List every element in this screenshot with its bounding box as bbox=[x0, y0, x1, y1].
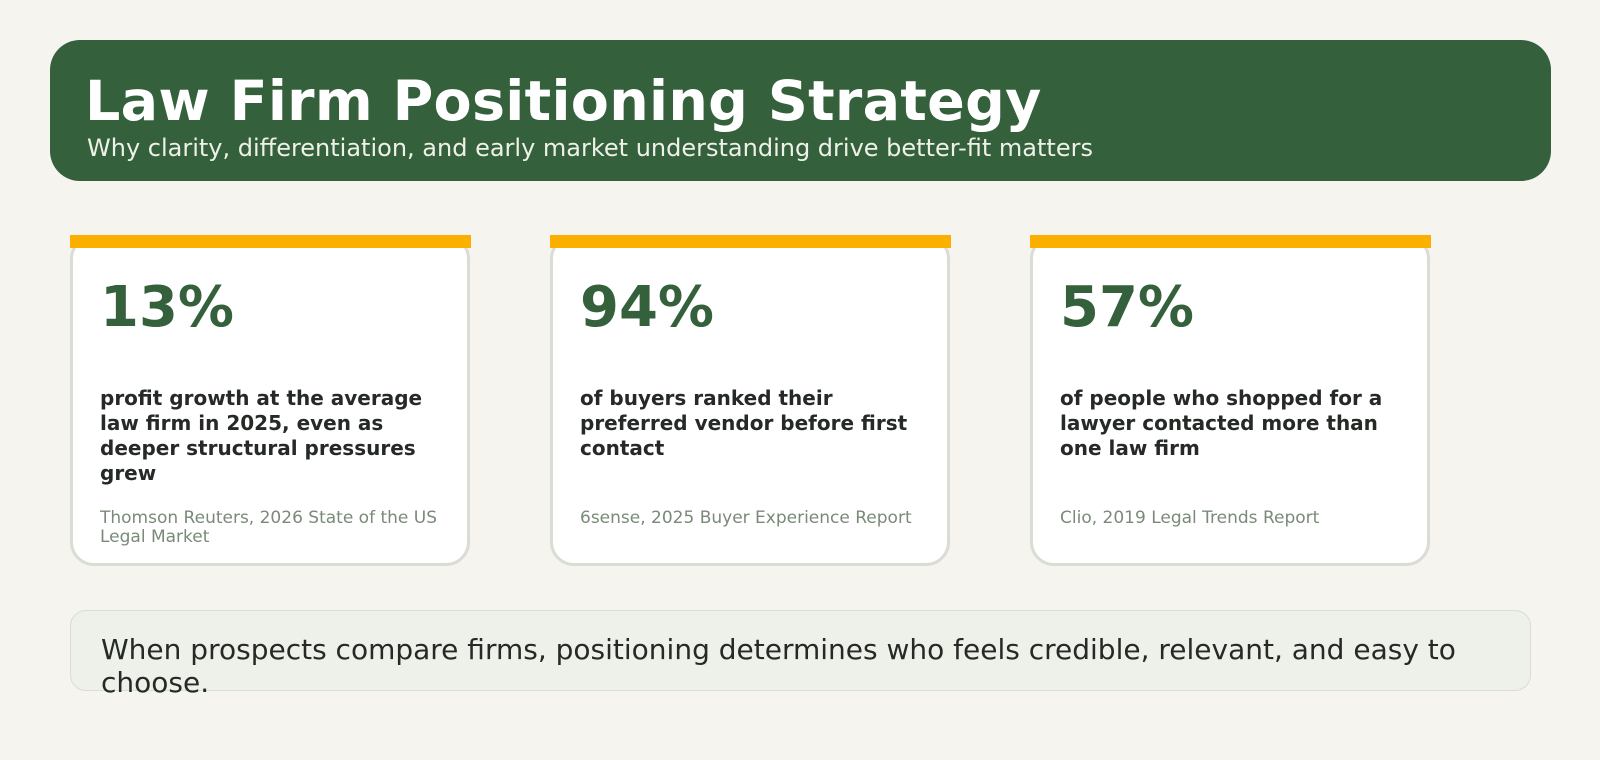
source: Clio, 2019 Legal Trends Report bbox=[1060, 508, 1319, 528]
callout: takeaway bbox=[70, 610, 1531, 691]
card: 57% bbox=[1030, 235, 1431, 566]
stat number: 94% bbox=[580, 275, 714, 340]
source: Thomson Reuters, 2026 State of the US Legal Market bbox=[100, 508, 437, 547]
stat description: profit growth at the average law firm in 2025, even as deeper structural pressures grew bbox=[100, 386, 422, 485]
stat description: of people who shopped for a lawyer contacted more than one law firm bbox=[1060, 386, 1382, 460]
source: 6sense, 2025 Buyer Experience Report bbox=[580, 508, 912, 528]
title: Law Firm Positioning Strategy bbox=[85, 69, 1042, 134]
header banner bbox=[50, 40, 1551, 181]
stat number: 57% bbox=[1060, 275, 1194, 340]
card: 94% bbox=[550, 235, 951, 566]
card: 13% bbox=[70, 235, 471, 566]
stat number: 13% bbox=[100, 275, 234, 340]
stat description: of buyers ranked their preferred vendor before first contact bbox=[580, 386, 907, 460]
subtitle: Why clarity, differentiation, and early market understanding drive better-fit matters bbox=[87, 134, 1093, 162]
callout: takeaway: When prospects compare firms, positioning determines who feels credible, relevant, and easy to choose. bbox=[101, 633, 1456, 699]
